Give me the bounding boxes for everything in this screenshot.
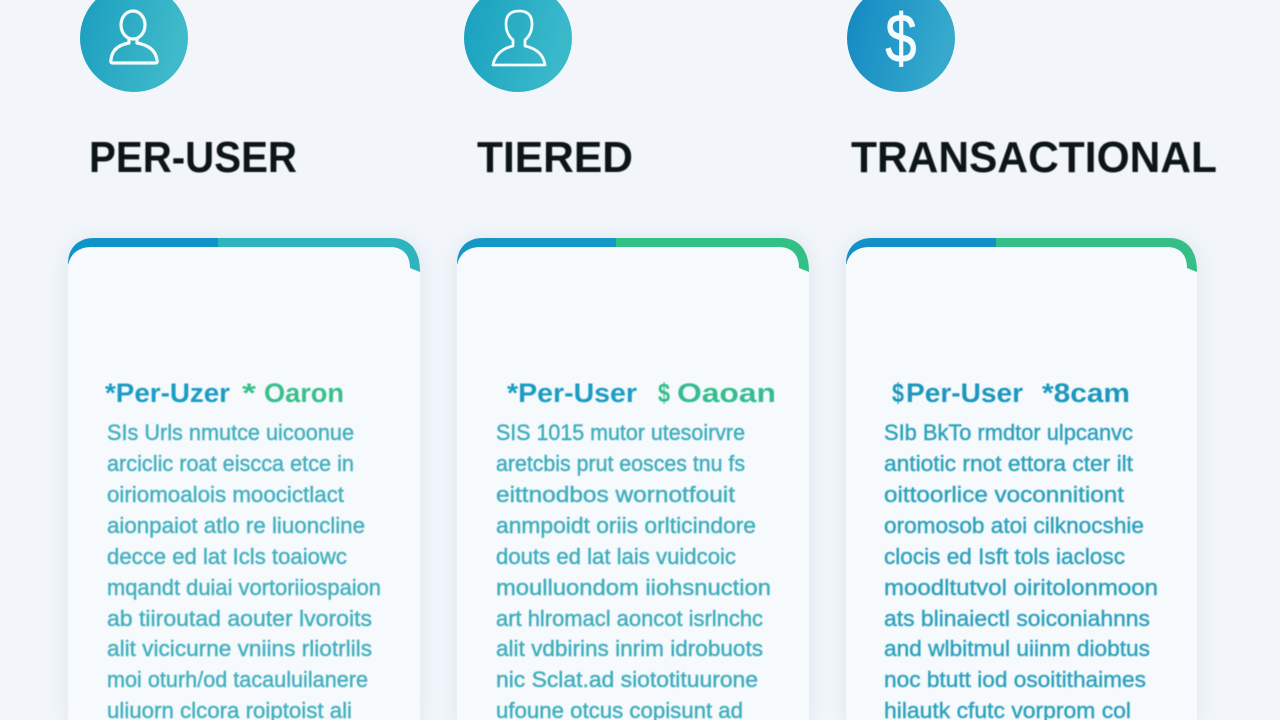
card body text: aretcbis prut eosces tnu fs xyxy=(496,451,745,476)
card body text: SIb BkTo rmdtor ulpcanvc xyxy=(884,420,1133,445)
card body text: oiriomoalois moocictlact xyxy=(107,482,344,507)
card body text: mqandt duiai vortoriiospaion xyxy=(107,575,381,600)
card body text: antiotic rnot ettora cter ilt xyxy=(884,451,1133,476)
card heading xyxy=(507,378,776,408)
icon: dollar in blue circle: $ xyxy=(885,1,917,77)
card body text: moi oturh/od tacauluilanere xyxy=(107,667,368,692)
card body text: moodltutvol oiritolonmoon xyxy=(884,575,1158,600)
heading: TRANSACTIONAL: TRANSACTIONAL xyxy=(851,133,1217,182)
card body text: ats blinaiectl soiconiahnns xyxy=(884,606,1150,631)
card body text: nic Sclat.ad siototituurone xyxy=(496,667,758,692)
card body text: ab tiiroutad aouter lvoroits xyxy=(107,606,372,631)
card body text: SIS 1015 mutor utesoirvre xyxy=(496,420,745,445)
card body text: SIs Urls nmutce uicoonue xyxy=(107,420,354,445)
card heading: *Per-User xyxy=(507,378,638,408)
card body text xyxy=(496,420,771,720)
card: per-user xyxy=(68,238,420,720)
icon: dollar in blue circle xyxy=(847,0,955,92)
card heading: Oaron xyxy=(264,378,344,408)
card heading: *Per-Uzer xyxy=(105,378,230,408)
card body text: eittnodbos wornotfouit xyxy=(496,482,735,507)
card body text: arciclic roat eiscca etce in xyxy=(107,451,354,476)
card body text: clocis ed Isft tols iaclosc xyxy=(884,544,1125,569)
heading: TIERED: TIERED xyxy=(477,133,633,182)
card body text: art hlromacl aoncot isrlnchc xyxy=(496,606,763,631)
card body text: alit vdbirins inrim idrobuots xyxy=(496,636,763,661)
card heading: $ xyxy=(892,378,904,408)
card heading: * xyxy=(242,378,257,408)
card heading: Per-User xyxy=(906,378,1024,408)
card: transactional xyxy=(846,238,1197,720)
panel: per-user column xyxy=(68,0,420,720)
card body text: oittoorlice voconnitiont xyxy=(884,482,1124,507)
card body text: douts ed lat lais vuidcoic xyxy=(496,544,736,569)
panel: tiered column xyxy=(457,0,809,720)
card body text: noc btutt iod osoitithaimes xyxy=(884,667,1146,692)
icon: user bust in teal circle xyxy=(464,0,572,92)
card: tiered xyxy=(457,238,809,720)
card body text: anmpoidt oriis orlticindore xyxy=(496,513,756,538)
card heading: Oaoan xyxy=(677,378,776,408)
card heading: $ xyxy=(658,378,670,408)
card heading: *8cam xyxy=(1042,378,1130,408)
card body text: moulluondom iiohsnuction xyxy=(496,575,771,600)
card body text: and wlbitmul uiinm diobtus xyxy=(884,636,1150,661)
card body text xyxy=(884,420,1158,720)
card heading xyxy=(892,378,1130,408)
card heading xyxy=(105,378,344,408)
icon: user in teal circle xyxy=(80,0,188,92)
card body text: aionpaiot atlo re liuoncline xyxy=(107,513,365,538)
card body text: alit vicicurne vniins rliotrlils xyxy=(107,636,372,661)
card body text xyxy=(107,420,381,720)
panel: transactional column xyxy=(846,0,1217,720)
heading: PER-USER: PER-USER xyxy=(89,133,297,182)
card body text: oromosob atoi cilknocshie xyxy=(884,513,1144,538)
card body text: decce ed lat Icls toaiowc xyxy=(107,544,347,569)
